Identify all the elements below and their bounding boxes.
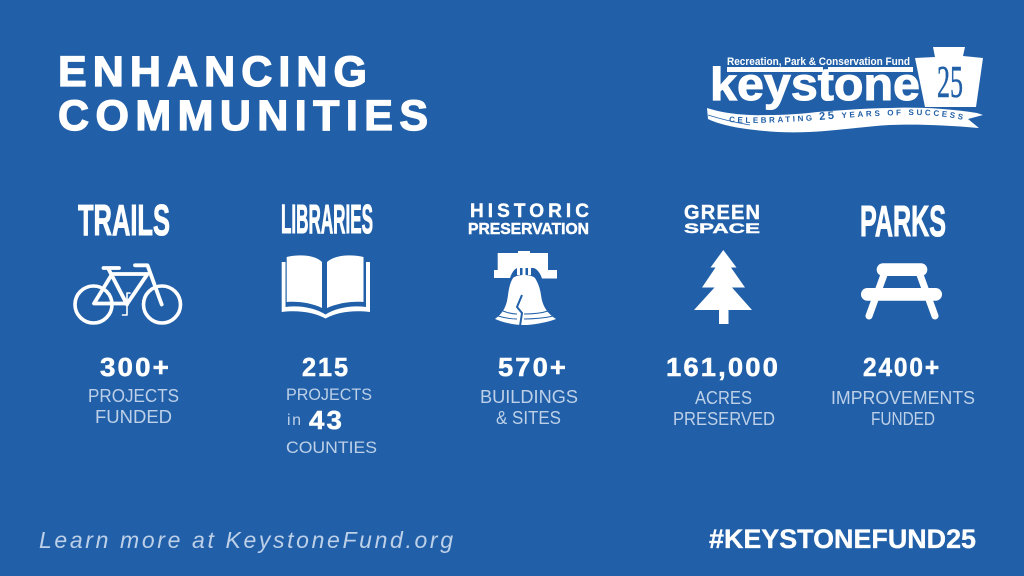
icon: open book (282, 255, 370, 318)
statistic: libraries projects (286, 352, 377, 457)
footer hashtag: #KEYSTONEFUND25 (709, 524, 976, 554)
logo: keystone fund: CELEBRATING 25 YEARS OF SUCCESS (730, 109, 963, 123)
panel: green space (666, 202, 780, 429)
panel: trails: TRAILS (78, 196, 170, 245)
statistic: green space acres: 161,000 (666, 352, 780, 382)
statistic: historic buildings: 570+ (498, 352, 568, 382)
panel: historic preservation: PRESERVATION (468, 221, 589, 238)
title (58, 48, 428, 140)
statistic: historic buildings: BUILDINGS (480, 387, 578, 407)
icon: picnic table (861, 263, 942, 316)
statistic: libraries projects: in (287, 412, 301, 429)
logo: keystone fund: keystone (710, 58, 920, 110)
statistic: trails projects (88, 352, 179, 427)
panel: trails (75, 196, 180, 427)
icon: bicycle (75, 265, 180, 323)
logo: keystone fund: Recreation, Park & Conservation Fund (727, 56, 910, 68)
panel: libraries (281, 196, 377, 457)
statistic: parks improvements: 2400+ (863, 352, 941, 382)
logo: keystone fund (707, 47, 983, 132)
statistic: parks improvements (831, 352, 975, 429)
statistic: historic buildings: & SITES (496, 408, 561, 428)
statistic: trails projects: FUNDED (95, 407, 172, 427)
statistic: libraries projects: COUNTIES (286, 438, 377, 457)
panel: historic preservation (468, 201, 589, 428)
icon: liberty bell (494, 251, 557, 326)
statistic: green space acres: PRESERVED (673, 409, 775, 429)
panel: parks (831, 197, 975, 429)
statistic: trails projects: 300+ (100, 352, 171, 382)
statistic: green space acres: ACRES (695, 388, 752, 408)
statistic: libraries projects: PROJECTS (286, 385, 372, 404)
statistic: trails projects: PROJECTS (88, 386, 179, 406)
panel: green space: GREEN (684, 202, 760, 224)
panel: green space: SPACE (684, 220, 760, 236)
statistic: libraries projects: 215 (302, 352, 350, 382)
text: LIBRARIES (281, 196, 373, 242)
logo: keystone fund: 25 (937, 56, 963, 107)
panel: historic preservation: HISTORIC (470, 201, 589, 222)
title: ENHANCING (58, 48, 367, 96)
icon: pine tree (694, 250, 752, 324)
title: COMMUNITIES (58, 92, 428, 140)
statistic: historic buildings (480, 352, 578, 428)
statistic: parks improvements: IMPROVEMENTS (831, 388, 975, 408)
statistic: parks improvements: FUNDED (871, 409, 935, 429)
statistic: libraries projects: 43 (309, 405, 344, 435)
panel: parks: PARKS (860, 197, 946, 246)
statistic: green space acres (666, 352, 780, 429)
footer link text: Learn more at KeystoneFund.org (39, 527, 453, 553)
